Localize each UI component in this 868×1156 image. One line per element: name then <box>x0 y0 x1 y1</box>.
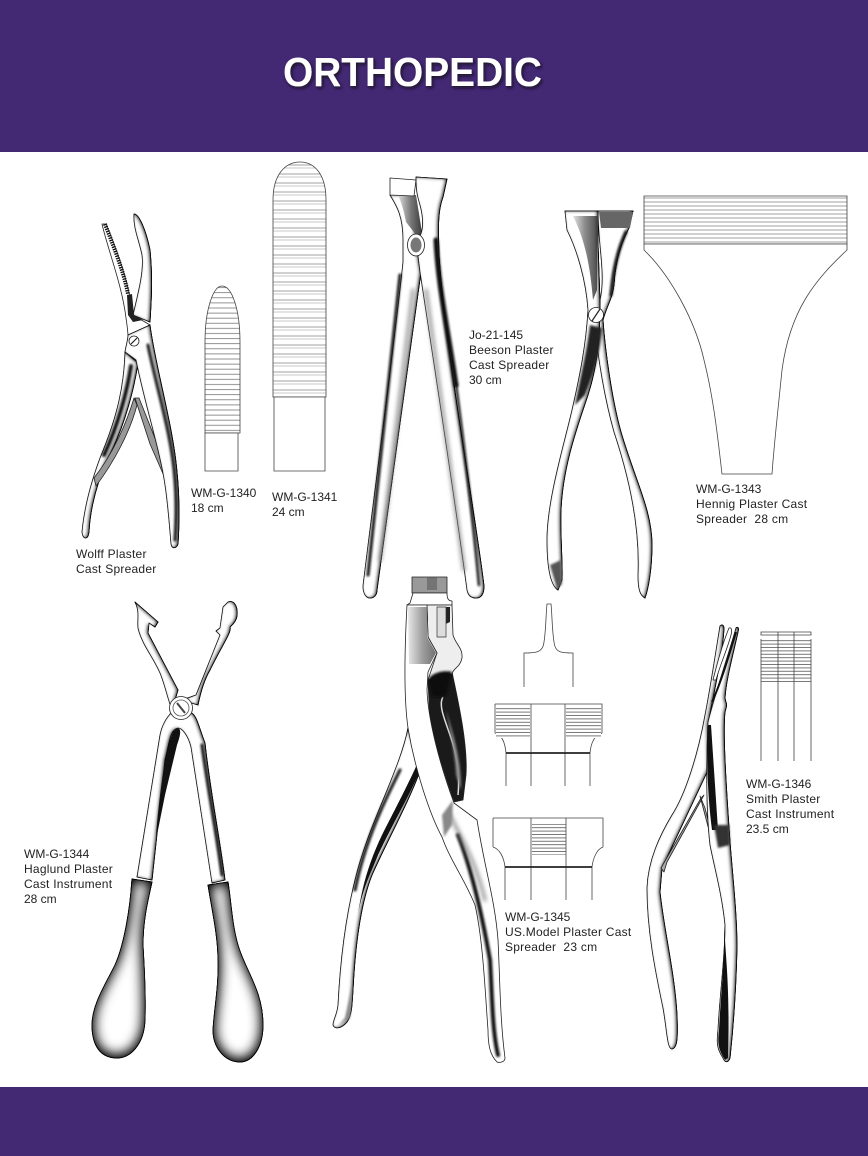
label: Haglund: Haglund Plaster <box>24 862 113 876</box>
instrument: Hennig plaster cast spreader <box>547 211 652 598</box>
label: 1345: WM-G-1345 <box>505 910 571 924</box>
label: Wolff: Cast Spreader <box>76 562 156 576</box>
instrument: Smith plaster cast instrument <box>647 625 738 1062</box>
ribbed blade 1340 <box>205 286 240 471</box>
label: 1345 <box>505 910 632 954</box>
footer band <box>0 1087 868 1156</box>
label: Beeson: 30 cm <box>469 373 502 387</box>
label: Smith: WM-G-1346 <box>746 777 812 791</box>
label: 1340: WM-G-1340 <box>191 486 257 500</box>
label: 1340: 18 cm <box>191 501 224 515</box>
left handle <box>333 728 421 1028</box>
left arm upper <box>135 602 178 710</box>
label: Beeson <box>469 328 554 387</box>
left lower handle <box>82 352 138 538</box>
right jaw <box>133 214 152 322</box>
label: Wolff <box>76 547 156 576</box>
detail blade: Smith <box>761 632 811 761</box>
left leg <box>363 195 421 598</box>
left serrated jaw <box>102 224 150 345</box>
label: 1341 <box>272 490 338 519</box>
shafts <box>137 712 225 883</box>
label: Smith: Smith Plaster <box>746 792 820 806</box>
pivot screw <box>129 336 139 346</box>
detail diagram: lower jaw <box>493 818 603 900</box>
label: Beeson: Cast Spreader <box>469 358 550 372</box>
instrument: Wolff plaster cast spreader <box>82 214 179 548</box>
ribbed head <box>412 577 447 593</box>
right leg <box>416 177 484 598</box>
upper right arm <box>427 605 462 680</box>
ribbed blade 1341 <box>273 162 326 471</box>
label: 1343: WM-G-1343 <box>696 482 762 496</box>
pivot stud <box>408 234 424 256</box>
label: Beeson: Beeson Plaster <box>469 343 554 357</box>
title: ORTHOPEDIC <box>283 49 542 95</box>
label: 1345: US.Model Plaster Cast <box>505 925 632 939</box>
right handle <box>125 325 179 548</box>
label: Smith: Cast Instrument <box>746 807 835 821</box>
instrument: US model plaster cast spreader <box>333 577 505 1062</box>
label: Beeson: Jo-21-145 <box>469 328 523 342</box>
pivot screw <box>588 308 604 322</box>
label: 1343: Spreader 28 cm <box>696 512 788 526</box>
label: 1341: 24 cm <box>272 505 305 519</box>
right handle <box>595 211 652 598</box>
right arm upper <box>182 602 237 705</box>
label: Haglund: 28 cm <box>24 892 57 906</box>
spring <box>661 795 727 895</box>
label: 1340 <box>191 486 257 515</box>
label: Wolff: Wolff Plaster <box>76 547 147 561</box>
instrument: Haglund plaster cast instrument <box>92 602 263 1062</box>
secondary spring <box>94 398 166 486</box>
left handle <box>547 211 600 590</box>
label: Haglund <box>24 847 113 906</box>
label: Haglund: Cast Instrument <box>24 877 113 891</box>
dark recess <box>428 672 466 802</box>
instrument: Beeson plaster cast spreader <box>363 177 484 598</box>
left jaw tip <box>390 178 416 196</box>
Hennig blade <box>644 196 847 474</box>
right ball handle <box>208 882 263 1062</box>
main body <box>405 605 505 1062</box>
left ball handle <box>92 879 152 1058</box>
label: Smith: 23.5 cm <box>746 822 789 836</box>
right limb <box>707 627 738 1062</box>
header band <box>0 0 868 152</box>
label: Smith <box>746 777 835 836</box>
label: Haglund: WM-G-1344 <box>24 847 90 861</box>
middle tip <box>713 628 732 680</box>
detail diagram: upper jaw <box>495 704 602 786</box>
label: 1343: Hennig Plaster Cast <box>696 497 808 511</box>
label: 1341: WM-G-1341 <box>272 490 338 504</box>
pivot screw <box>170 696 192 720</box>
label: 1343 <box>696 482 808 526</box>
label: 1345: Spreader 23 cm <box>505 940 597 954</box>
left handle <box>647 625 724 1049</box>
detail diagram: side profile <box>524 604 573 687</box>
